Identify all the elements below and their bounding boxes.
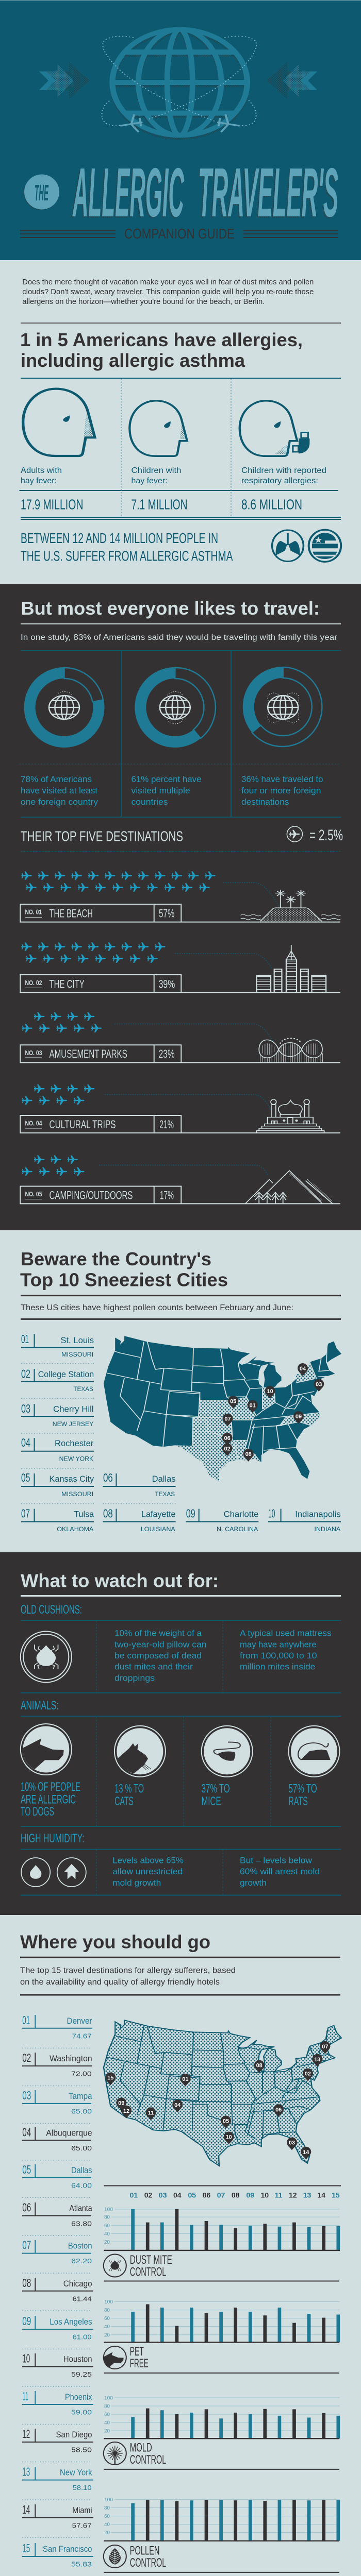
map: US pollen cities: 10: [267, 1388, 273, 1395]
list: destination rankings: Los Angeles: [50, 2317, 92, 2327]
intro text: on the availability and quality of allergy friendly hotels: [20, 1978, 220, 1987]
list: destination rankings: 59.25: [71, 2370, 92, 2378]
destination 5: camping and outdoors: [20, 1155, 340, 1204]
list: sneeziest cities: 06: [103, 1471, 113, 1484]
destination 2: the city: 39%: [159, 978, 175, 990]
bar chart: mold control: 80: [104, 2404, 110, 2409]
list: destination rankings: 55.83: [71, 2561, 92, 2568]
list: destination rankings: 06: [22, 2201, 31, 2214]
list: destination rankings: Miami: [72, 2505, 92, 2515]
list: destination rankings: 65.00: [71, 2144, 92, 2152]
chart column numbers: 06: [203, 2191, 210, 2199]
chart column numbers: [130, 2191, 340, 2199]
donut captions: 61% percent have: [131, 774, 201, 784]
map: allergy friendly destinations: 02: [305, 2071, 311, 2077]
donut captions: 78% of Americans: [21, 774, 92, 784]
list: sneeziest cities: 08: [103, 1506, 113, 1520]
chart: donut 61 percent: [135, 667, 216, 748]
list: destination rankings: 08: [22, 2276, 31, 2290]
icon: water drop and arrow: [21, 1858, 86, 1887]
stat labels: hay fever:: [21, 477, 57, 485]
animal stats: CATS: [114, 1794, 134, 1808]
heading: [20, 329, 303, 371]
subheading: high humidity: HIGH HUMIDITY:: [21, 1832, 85, 1845]
animal stats: RATS: [288, 1794, 308, 1808]
intro text: The top 15 travel destinations for allergy sufferers, based: [20, 1967, 236, 1975]
stat numbers: 8.6 MILLION: [241, 497, 302, 512]
list: sneeziest cities: INDIANA: [314, 1527, 341, 1533]
bar chart: pollen control: 100: [104, 2497, 113, 2503]
map: US pollen cities: 07: [224, 1416, 231, 1422]
title: THE: [35, 180, 49, 206]
stat labels: Adults with: [21, 466, 62, 475]
list: sneeziest cities: College Station: [38, 1369, 94, 1379]
destination 4: cultural trips: NO. 04: [25, 1120, 42, 1127]
text: mattress fact: A typical used mattress: [240, 1629, 332, 1638]
list: destination rankings: Houston: [63, 2354, 92, 2364]
list: sneeziest cities: 01: [21, 1332, 29, 1346]
subheading: old cushions: OLD CUSHIONS:: [21, 1603, 82, 1617]
bar chart: dust mite control: 20: [104, 2240, 110, 2245]
icon: heads: [23, 389, 309, 456]
map: allergy friendly destinations: 07: [322, 2044, 329, 2050]
list: destination rankings: San Diego: [56, 2430, 92, 2439]
text: mattress fact: [240, 1629, 332, 1672]
heading: But most everyone likes to travel:: [21, 598, 320, 619]
list: destination rankings: New York: [60, 2468, 92, 2478]
legend: pollen control: [104, 2544, 339, 2572]
destination 3: amusement parks: [20, 1012, 340, 1062]
list: destination rankings: 61.44: [73, 2295, 92, 2302]
bar chart: pet free: 40: [104, 2324, 110, 2330]
list: sneeziest cities: TEXAS: [73, 1386, 93, 1393]
list: destination rankings: 15: [22, 2541, 30, 2555]
list: destination rankings: 61.00: [73, 2333, 92, 2341]
chart column numbers: 01: [130, 2191, 138, 2199]
text: mattress fact: from 100,000 to 10: [240, 1651, 317, 1660]
chart column numbers: 13: [303, 2191, 311, 2199]
list: sneeziest cities: MISSOURI: [61, 1352, 93, 1358]
intro text: These US cities have highest pollen counts between February and June:: [21, 1303, 293, 1312]
list: sneeziest cities: 10: [268, 1506, 275, 1520]
map: US pollen cities: [104, 1336, 341, 1482]
bar chart: pet free: 60: [104, 2316, 110, 2321]
map: US pollen cities: 06: [224, 1435, 231, 1442]
map: US pollen cities: 05: [230, 1398, 236, 1404]
list: destination rankings: 57.67: [72, 2522, 92, 2530]
animal stats: 10% OF PEOPLE: [21, 1780, 80, 1794]
legend: plane equals 2.5 percent: [287, 826, 343, 844]
chart column numbers: 15: [332, 2191, 340, 2199]
intro text: Does the mere thought of vacation make your eyes well in fear of dust mites and pollen: [22, 278, 314, 286]
chart column numbers: 03: [159, 2191, 167, 2199]
animal stats: [21, 1780, 317, 1819]
list: destination rankings: 58.50: [71, 2446, 92, 2454]
list: destination rankings: Atlanta: [69, 2204, 92, 2213]
bar chart: dust mite control: 40: [104, 2231, 110, 2237]
map: allergy friendly destinations: 05: [223, 2118, 229, 2124]
list: destination rankings: 65.00: [71, 2107, 92, 2115]
destination 1: the beach: NO. 01: [25, 909, 42, 916]
legend: pollen control: POLLEN: [130, 2544, 159, 2558]
list: sneeziest cities: 02: [21, 1367, 30, 1381]
heading: [20, 1248, 228, 1290]
donut captions: one foreign country: [21, 797, 99, 807]
legend: dust mite control: DUST MITE: [130, 2253, 172, 2267]
heading: Beware the Country's: [21, 1248, 211, 1269]
destination 1: the beach: [20, 871, 340, 922]
legend: pet free: PET: [130, 2345, 144, 2359]
map: allergy friendly destinations: 11: [148, 2110, 154, 2116]
chart column numbers: 08: [232, 2191, 240, 2199]
intro text: allergens on the horizon—whether you're bound for the beach, or Berlin.: [22, 297, 265, 306]
panel: header: [0, 0, 361, 260]
text: humidity facts: [112, 1855, 320, 1888]
list: destination rankings: 01: [22, 2013, 30, 2027]
list: sneeziest cities: Kansas City: [50, 1474, 94, 1484]
map: allergy friendly destinations: 09: [118, 2100, 124, 2106]
list: destination rankings: Chicago: [63, 2279, 92, 2289]
destination 1: the beach: THE BEACH: [50, 907, 93, 920]
map: allergy friendly destinations: [104, 2020, 341, 2166]
bar chart: pet free: [104, 2299, 340, 2342]
intro text: [22, 278, 314, 306]
list: sneeziest cities: LOUISIANA: [141, 1527, 175, 1533]
icon: globe with flight paths: [102, 29, 256, 138]
text: humidity facts: But – levels below: [240, 1855, 313, 1865]
chart column numbers: 10: [261, 2191, 269, 2199]
legend: pet free: FREE: [130, 2357, 149, 2370]
destination 4: cultural trips: 21%: [159, 1118, 174, 1131]
list: sneeziest cities: Tulsa: [74, 1510, 94, 1519]
map: US pollen cities: 08: [245, 1451, 252, 1458]
map: allergy friendly destinations: 06: [275, 2107, 282, 2113]
list: destination rankings: Boston: [68, 2241, 92, 2251]
list: destination rankings: Phoenix: [65, 2392, 92, 2402]
bar chart: mold control: 100: [104, 2396, 113, 2401]
list: sneeziest cities: MISSOURI: [61, 1492, 93, 1498]
donut captions: countries: [131, 797, 168, 807]
list: sneeziest cities: N. CAROLINA: [217, 1527, 258, 1533]
icon: mouse: [202, 1726, 253, 1777]
text: pillow fact: be composed of dead: [114, 1651, 202, 1660]
list: sneeziest cities: Dallas: [152, 1474, 176, 1484]
donut captions: have visited at least: [21, 786, 97, 795]
stat labels: [21, 466, 326, 485]
list: destination rankings: [22, 2013, 93, 2568]
list: destination rankings: Albuquerque: [46, 2128, 92, 2138]
map: allergy friendly destinations: 14: [303, 2149, 309, 2156]
chart column numbers: 14: [317, 2191, 325, 2199]
panel: travel habits: [0, 584, 361, 1230]
stat labels: respiratory allergies:: [241, 477, 318, 485]
list: sneeziest cities: 09: [186, 1506, 195, 1520]
list: sneeziest cities: 05: [21, 1471, 30, 1484]
icon: right arrows: [267, 62, 317, 99]
bar chart: pollen control: [104, 2497, 340, 2541]
map: US pollen cities: 02: [224, 1446, 231, 1452]
stat numbers: 17.9 MILLION: [21, 497, 84, 512]
asthma callout: [21, 530, 233, 564]
panel: allergy statistics: [0, 260, 361, 584]
map: allergy friendly destinations: 13: [314, 2057, 320, 2063]
destination 3: amusement parks: NO. 03: [25, 1049, 42, 1057]
subheading: top five destinations: THEIR TOP FIVE DESTINATIONS: [21, 828, 183, 844]
list: destination rankings: 09: [22, 2314, 31, 2328]
heading: Top 10 Sneeziest Cities: [20, 1269, 228, 1290]
icon: dog: [21, 1724, 72, 1775]
subtitle: companion guide: COMPANION GUIDE: [124, 226, 235, 242]
bar chart: pet free: 100: [104, 2299, 113, 2305]
donut captions: destinations: [241, 797, 289, 807]
text: humidity facts: allow unrestricted: [112, 1867, 183, 1876]
icon: dust mite: [21, 1631, 72, 1683]
bar chart: dust mite control: 60: [104, 2223, 110, 2229]
chart column numbers: 02: [144, 2191, 152, 2199]
animal stats: 13 % TO: [114, 1782, 144, 1796]
map: allergy friendly destinations: 15: [107, 2075, 113, 2081]
donut captions: [21, 774, 323, 807]
list: destination rankings: 04: [22, 2125, 31, 2139]
chart: donut 78 percent: [24, 667, 105, 748]
study text: In one study, 83% of Americans said they would be traveling with family this year: [21, 633, 337, 642]
chart column numbers: 12: [289, 2191, 297, 2199]
legend: dust mite control: [104, 2253, 339, 2281]
heading: Where you should go: [20, 1931, 210, 1952]
legend: mold control: [104, 2441, 339, 2469]
legend: pollen control: CONTROL: [130, 2556, 166, 2570]
list: sneeziest cities: 04: [21, 1436, 30, 1449]
destination 1: the beach: 57%: [159, 907, 174, 920]
panel: what to watch out for: [0, 1552, 361, 1915]
heading: What to watch out for:: [21, 1570, 219, 1591]
list: sneeziest cities: TEXAS: [155, 1492, 175, 1498]
icon: lungs and flag: [272, 530, 341, 562]
map: allergy friendly destinations: 10: [226, 2134, 232, 2140]
list: sneeziest cities: 07: [21, 1506, 30, 1520]
list: destination rankings: 12: [22, 2427, 30, 2441]
map: US pollen cities: 03: [316, 1381, 322, 1387]
map: allergy friendly destinations: 08: [256, 2063, 262, 2069]
subtitle: companion guide: [20, 226, 338, 242]
destination 5: camping and outdoors: 17%: [160, 1189, 174, 1201]
bar chart: pollen control: 60: [104, 2514, 110, 2519]
destination 2: the city: NO. 02: [25, 979, 42, 987]
destination 4: cultural trips: CULTURAL TRIPS: [50, 1118, 116, 1131]
bar chart: dust mite control: 80: [104, 2215, 110, 2221]
legend: pet free: [104, 2345, 339, 2373]
legend: plane equals 2.5 percent: = 2.5%: [309, 827, 343, 844]
destination 2: the city: [20, 942, 340, 992]
text: pillow fact: 10% of the weight of a: [114, 1629, 202, 1638]
intro text: [20, 1967, 236, 1987]
text: humidity facts: 60% will arrest mold: [240, 1867, 320, 1876]
list: destination rankings: 64.00: [71, 2181, 92, 2189]
stat labels: hay fever:: [131, 477, 167, 485]
stat numbers: [21, 497, 302, 512]
text: mattress fact: may have anywhere: [240, 1639, 317, 1650]
asthma callout: BETWEEN 12 AND 14 MILLION PEOPLE IN: [21, 530, 218, 546]
animal stats: 57% TO: [288, 1782, 317, 1796]
text: pillow fact: dust mites and their: [114, 1662, 193, 1672]
donut captions: visited multiple: [131, 786, 190, 795]
list: sneeziest cities: OKLAHOMA: [57, 1527, 94, 1533]
stat labels: Children with reported: [241, 466, 326, 475]
chart column numbers: 07: [217, 2191, 225, 2199]
list: sneeziest cities: Cherry Hill: [53, 1404, 94, 1414]
list: sneeziest cities: Charlotte: [224, 1510, 258, 1519]
list: destination rankings: 07: [22, 2239, 31, 2252]
chart: donut 36 percent: [243, 667, 322, 747]
animal stats: 37% TO: [202, 1782, 230, 1796]
bar chart: mold control: 60: [104, 2412, 110, 2417]
list: destination rankings: San Francisco: [43, 2544, 92, 2554]
bar chart: pollen control: 20: [104, 2530, 110, 2536]
list: sneeziest cities: 03: [21, 1402, 30, 1415]
list: sneeziest cities: Rochester: [55, 1438, 94, 1448]
list: sneeziest cities: NEW YORK: [59, 1456, 94, 1463]
legend: mold control: CONTROL: [130, 2453, 166, 2467]
bar chart: pollen control: 80: [104, 2505, 110, 2511]
list: destination rankings: 13: [22, 2465, 30, 2479]
bar chart: pet free: 80: [104, 2308, 110, 2313]
legend: dust mite control: CONTROL: [130, 2265, 166, 2279]
subheading: animals: ANIMALS:: [21, 1699, 59, 1713]
destination 4: cultural trips: [20, 1084, 340, 1133]
list: destination rankings: 02: [22, 2051, 31, 2064]
list: sneeziest cities: Lafayette: [141, 1510, 175, 1519]
bar chart: dust mite control: [104, 2207, 340, 2250]
destination 2: the city: THE CITY: [50, 978, 85, 990]
legend: mold control: MOLD: [130, 2441, 152, 2455]
bar chart: pollen control: 40: [104, 2522, 110, 2528]
destination 5: camping and outdoors: CAMPING/OUTDOORS: [50, 1189, 133, 1201]
list: destination rankings: Denver: [67, 2016, 92, 2026]
bar chart: pet free: 20: [104, 2332, 110, 2338]
list: destination rankings: 58.10: [73, 2484, 92, 2492]
list: destination rankings: 11: [22, 2389, 28, 2403]
bar chart: dust mite control: 100: [104, 2207, 113, 2212]
intro text: clouds? Don't sweat, weary traveler. This companion guide will help you re-route those: [22, 287, 314, 296]
panel: where you should go: [0, 1915, 361, 2576]
list: destination rankings: 74.67: [72, 2032, 92, 2040]
stat numbers: 7.1 MILLION: [131, 497, 188, 512]
list: sneeziest cities: St. Louis: [60, 1335, 94, 1345]
list: destination rankings: Washington: [50, 2054, 92, 2063]
heading: including allergic asthma: [21, 350, 245, 371]
icon: left arrows: [39, 62, 89, 99]
list: destination rankings: 62.20: [71, 2257, 92, 2265]
chart column numbers: 05: [188, 2191, 196, 2199]
animal stats: MICE: [202, 1794, 221, 1808]
list: destination rankings: 10: [22, 2352, 30, 2365]
list: sneeziest cities: [21, 1332, 341, 1533]
list: destination rankings: 14: [22, 2503, 30, 2516]
asthma callout: THE U.S. SUFFER FROM ALLERGIC ASTHMA: [21, 548, 233, 564]
donut captions: 36% have traveled to: [241, 774, 323, 784]
text: humidity facts: mold growth: [112, 1878, 161, 1888]
map: allergy friendly destinations: 03: [289, 2140, 295, 2146]
icon: rat: [289, 1726, 339, 1777]
map: US pollen cities: 04: [300, 1366, 306, 1372]
list: destination rankings: 03: [22, 2089, 31, 2102]
list: sneeziest cities: NEW JERSEY: [53, 1421, 94, 1428]
destination 3: amusement parks: 23%: [159, 1047, 175, 1060]
chart column numbers: 04: [173, 2191, 182, 2199]
stat labels: Children with: [131, 466, 182, 475]
animal stats: TO DOGS: [21, 1805, 54, 1819]
animal stats: ARE ALLERGIC: [21, 1792, 76, 1806]
map: allergy friendly destinations: 01: [182, 2076, 189, 2082]
destination 5: camping and outdoors: NO. 05: [25, 1191, 42, 1198]
map: US pollen cities: 09: [296, 1414, 302, 1420]
text: pillow fact: droppings: [114, 1673, 155, 1683]
icon: cat: [114, 1726, 166, 1777]
list: destination rankings: 72.00: [71, 2070, 92, 2078]
list: sneeziest cities: Indianapolis: [295, 1510, 341, 1519]
text: humidity facts: growth: [240, 1878, 267, 1888]
list: destination rankings: 59.00: [71, 2409, 92, 2416]
list: destination rankings: Dallas: [71, 2165, 92, 2175]
map: allergy friendly destinations: 12: [123, 2108, 129, 2114]
panel: sneeziest cities: [0, 1230, 361, 1552]
donut captions: four or more foreign: [241, 786, 321, 795]
text: pillow fact: two-year-old pillow can: [114, 1639, 207, 1650]
destination 3: amusement parks: AMUSEMENT PARKS: [50, 1047, 127, 1060]
text: pillow fact: [114, 1629, 207, 1683]
list: destination rankings: 05: [22, 2163, 31, 2176]
bar chart: mold control: [104, 2396, 340, 2438]
bar chart: mold control: 40: [104, 2420, 110, 2426]
map: US pollen cities: 01: [250, 1402, 256, 1409]
text: humidity facts: Levels above 65%: [112, 1855, 184, 1865]
list: destination rankings: Tampa: [69, 2091, 92, 2101]
map: allergy friendly destinations: 04: [174, 2102, 181, 2108]
chart column numbers: 09: [247, 2191, 254, 2199]
chart column numbers: 11: [275, 2191, 283, 2199]
heading: 1 in 5 Americans have allergies,: [20, 329, 303, 350]
bar chart: mold control: 20: [104, 2428, 110, 2434]
text: mattress fact: million mites inside: [240, 1662, 315, 1672]
list: destination rankings: 63.80: [71, 2219, 92, 2227]
